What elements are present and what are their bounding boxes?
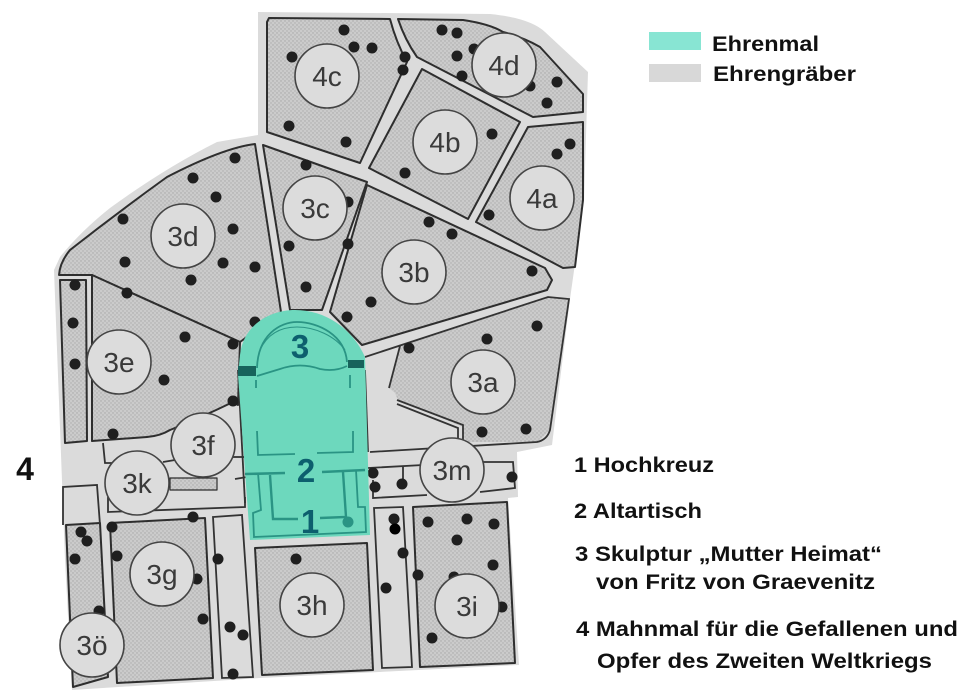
key item 3: 3 Skulptur „Mutter Heimat“ [575, 543, 882, 566]
field labels: 3i [456, 591, 478, 622]
number 1: high cross: 1 [301, 503, 319, 540]
field labels: 3ö [76, 630, 108, 661]
ground outline [54, 12, 588, 690]
number 3: sculpture: 3 [291, 328, 309, 365]
grave fields [59, 18, 583, 687]
number 4: memorial marker: 4 [16, 451, 34, 487]
field labels: 3a [467, 367, 499, 398]
key item 3: von Fritz von Graevenitz [596, 571, 875, 594]
key item 4: 4 Mahnmal für die Gefallenen und [576, 618, 958, 641]
key: numbered monuments [574, 454, 958, 673]
field labels: 3h [296, 590, 328, 621]
field labels: 4a [526, 183, 558, 214]
paths and borders [63, 297, 569, 678]
field labels: 3f [191, 430, 215, 461]
legend [649, 32, 856, 86]
field labels: 3e [103, 347, 135, 378]
legend item: Ehrenmal [649, 32, 819, 56]
field labels: 3d [167, 221, 199, 252]
field labels: 3k [122, 468, 153, 499]
legend item: Ehrengräber [649, 63, 856, 86]
field labels: 4b [429, 127, 461, 158]
field labels [60, 33, 574, 677]
key item 1: 1 Hochkreuz [574, 454, 714, 477]
field labels: 4c [312, 61, 342, 92]
key item 3 [575, 543, 882, 594]
field labels: 3m [433, 455, 471, 486]
legend item: Ehrenmal: Ehrenmal [712, 33, 819, 56]
field labels: 3b [398, 257, 430, 288]
legend item: Ehrengräber: Ehrengräber [713, 63, 856, 86]
field labels: 3c [300, 193, 330, 224]
field labels: 3g [146, 559, 178, 590]
Ehrenmal highlighted area [238, 310, 370, 540]
key item 4: Opfer des Zweiten Weltkriegs [597, 650, 932, 673]
key item 4 [576, 618, 958, 673]
trees [68, 24, 576, 680]
key item 2: 2 Altartisch [574, 500, 702, 523]
field labels: 4d [488, 50, 520, 81]
number 2: altar table: 2 [297, 452, 315, 489]
map: cemetery plan [54, 12, 588, 690]
